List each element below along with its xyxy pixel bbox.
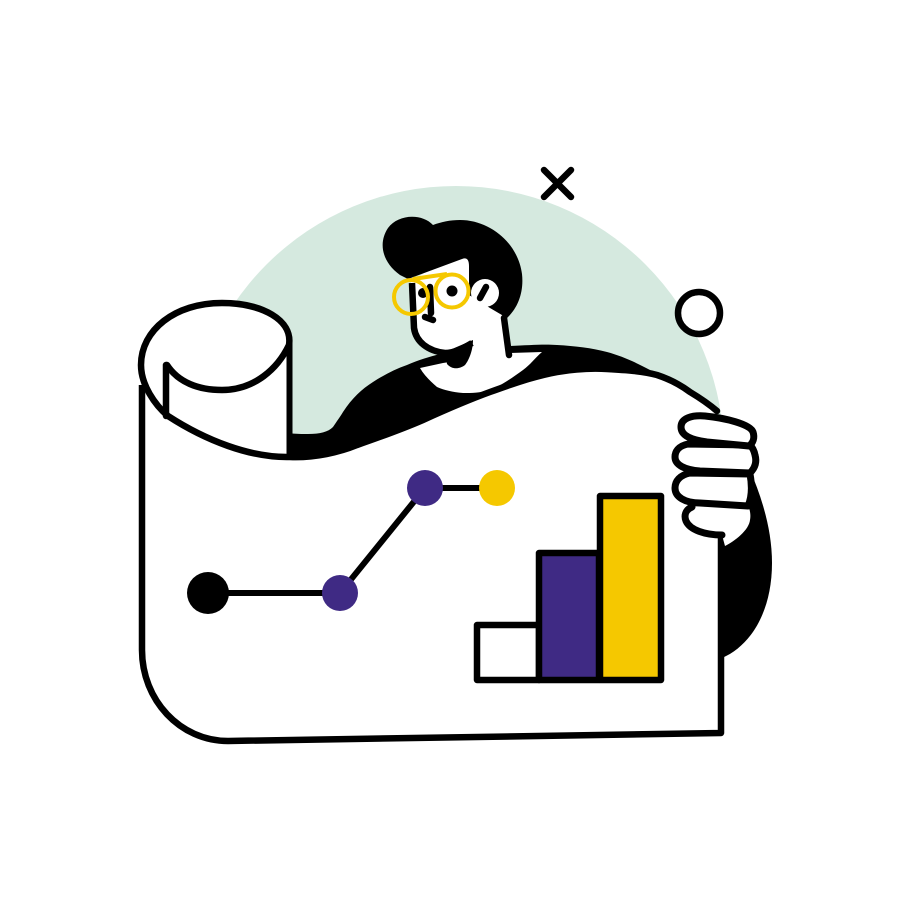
torso xyxy=(288,345,670,470)
collar xyxy=(420,352,542,393)
face outline xyxy=(412,283,472,353)
icon: ring xyxy=(678,292,720,334)
nose xyxy=(425,287,433,320)
mouth xyxy=(445,340,473,368)
first finger xyxy=(681,416,754,446)
ear mark xyxy=(480,287,486,298)
third finger xyxy=(675,473,751,506)
hand xyxy=(675,416,756,546)
paper sheet xyxy=(141,302,721,741)
purple bar xyxy=(539,553,599,680)
ear xyxy=(471,279,499,307)
person xyxy=(288,217,772,660)
line chart xyxy=(187,470,515,614)
black point xyxy=(187,572,229,614)
paper outline xyxy=(142,385,721,741)
background circle xyxy=(188,186,724,722)
bar chart xyxy=(477,496,661,680)
eyes xyxy=(418,286,458,298)
neck and face xyxy=(411,256,510,362)
scroll roll outline xyxy=(141,303,717,457)
thumb outline xyxy=(685,507,722,535)
hair xyxy=(383,217,522,318)
scroll inner edge xyxy=(163,365,169,416)
torso right side xyxy=(700,470,772,660)
white bar xyxy=(477,625,539,680)
thumb fill xyxy=(685,505,750,546)
purple point low xyxy=(322,575,358,611)
glasses xyxy=(394,274,468,314)
paper scroll xyxy=(141,302,721,741)
white mask below circle xyxy=(150,440,770,740)
yellow bar xyxy=(600,496,661,680)
purple point high xyxy=(407,470,443,506)
yellow point xyxy=(479,470,515,506)
second finger xyxy=(675,444,756,473)
chart line xyxy=(208,488,497,593)
icon: cross xyxy=(544,170,571,197)
neck line xyxy=(504,318,509,355)
scroll right edge xyxy=(286,342,292,457)
